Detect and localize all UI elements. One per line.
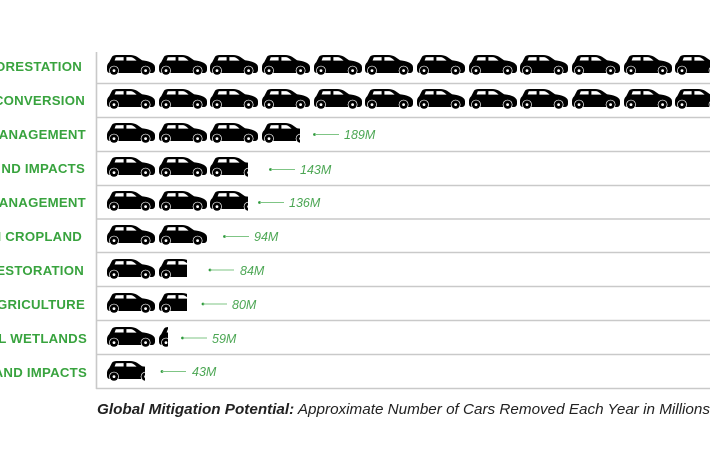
row 3: management 189M: 189M [344, 128, 376, 142]
row 5: management 136M [0, 191, 321, 212]
row 5: management 136M: ANAGEMENT [0, 195, 86, 210]
row 5: management 136M: 136M [289, 196, 321, 210]
row 3: management 189M [0, 123, 376, 144]
row 7: restoration 84M: 84M [240, 264, 265, 278]
row 7: restoration 84M [0, 259, 265, 280]
chart axis and row separators [96, 52, 710, 389]
row 10: land impacts 43M: 43M [192, 365, 217, 379]
row 6: cropland 94M [0, 225, 279, 246]
row 4: land impacts 143M: 143M [300, 163, 332, 177]
row 2: conversion [0, 89, 710, 110]
row 9: wetlands 59M: 59M [212, 332, 237, 346]
row 9: wetlands 59M: L WETLANDS [0, 331, 87, 346]
row 6: cropland 94M: 94M [254, 230, 279, 244]
row 4: land impacts 143M [1, 157, 332, 178]
row 10: land impacts 43M [0, 361, 217, 382]
row 8: agriculture 80M [0, 293, 257, 314]
row 3: management 189M: ANAGEMENT [0, 127, 86, 142]
row 4: land impacts 143M: ND IMPACTS [1, 161, 85, 176]
row 8: agriculture 80M: 80M [232, 298, 257, 312]
caption: Global Mitigation Potential: Approximate Number of Cars Removed Each Year in Millions [97, 401, 710, 418]
row 9: wetlands 59M [0, 327, 237, 348]
row 1: orestation [0, 55, 710, 76]
